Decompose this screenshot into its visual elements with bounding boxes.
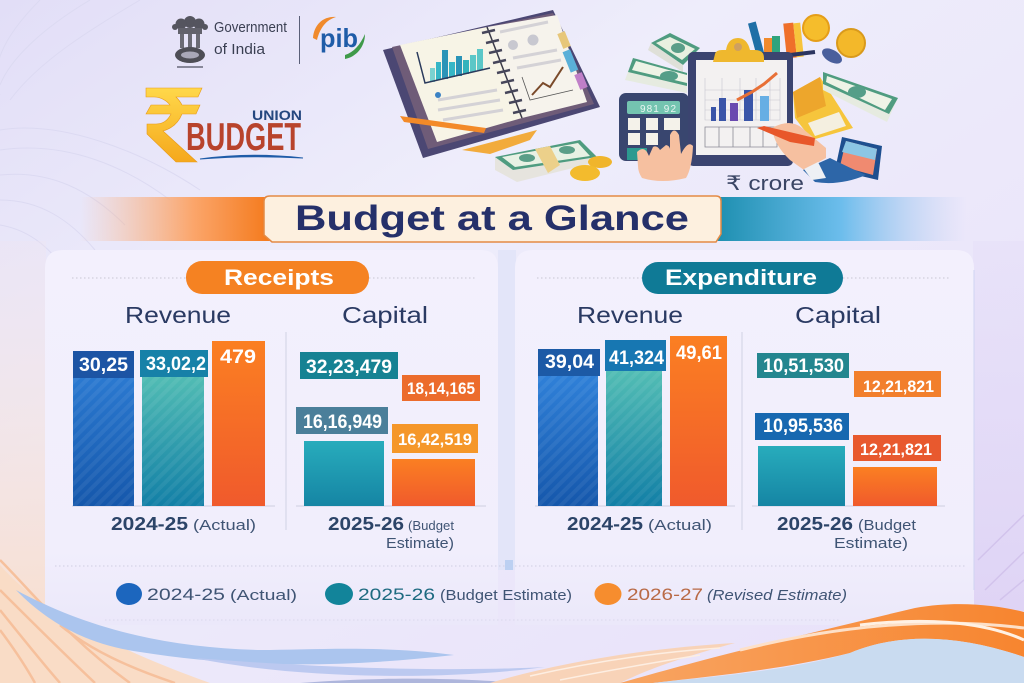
panel background [515, 250, 974, 625]
hand on calculator [637, 130, 693, 181]
page tabs [557, 31, 571, 49]
banknotes left [625, 33, 700, 93]
bottom wave decoration [0, 560, 1024, 683]
legend item: actual: (Actual) [230, 587, 297, 604]
icon: national emblem [172, 16, 208, 68]
value 12,21,821: 12,21,821 [860, 440, 932, 459]
panel: expenditure [515, 250, 974, 625]
bar 2: 41,324 [609, 348, 664, 369]
title text: Budget at a Glance [295, 199, 689, 238]
crore unit label: ₹ crore [726, 173, 804, 195]
right year label: (Budget [408, 518, 454, 533]
capital bar chart [296, 352, 480, 506]
bar 2 [605, 340, 666, 506]
value 16,42,519 [392, 424, 478, 453]
value 10,51,530: 10,51,530 [763, 356, 844, 377]
value 12,21,821 [853, 435, 941, 461]
value 18,14,165 [402, 375, 480, 401]
calculator [619, 93, 689, 161]
receipts pill: Receipts [224, 265, 334, 290]
value 12,21,821: 12,21,821 [863, 377, 934, 396]
band blue [716, 197, 966, 241]
government text: Government [214, 19, 288, 36]
panel background [45, 250, 498, 625]
legend [116, 583, 847, 605]
bar 2: 33,02,2 [146, 354, 206, 375]
expenditure pill [642, 262, 843, 294]
gold coin [803, 15, 829, 41]
blue pill [819, 45, 845, 67]
union text: UNION [252, 107, 302, 123]
banknote right [823, 72, 898, 122]
left year label: (Actual) [648, 517, 712, 534]
bar 3 [212, 341, 265, 506]
icon: gold rupee [146, 88, 202, 162]
bar 2 [140, 350, 208, 506]
government of India logo [172, 16, 365, 68]
legend item: actual: 2024-25 [147, 585, 225, 604]
value 10,95,536: 10,95,536 [763, 416, 843, 437]
right year label: Estimate) [834, 535, 908, 552]
right year label [328, 514, 454, 552]
budget text: BUDGET [186, 116, 301, 159]
revenue heading: Revenue [125, 302, 231, 328]
revenue bar chart [73, 341, 265, 506]
gold coins [588, 156, 612, 168]
envelope [793, 77, 853, 140]
notebook [383, 10, 600, 158]
bar 1 [73, 351, 134, 506]
orange bar [392, 459, 475, 506]
icon: PIB logo: pib [320, 23, 358, 53]
panel: receipts [45, 250, 498, 625]
left year label [567, 514, 712, 534]
value 16,16,949: 16,16,949 [303, 412, 382, 433]
teal bar [304, 441, 384, 506]
spiral binding [487, 27, 522, 118]
legend item: revised estimate: (Revised Estimate) [707, 587, 847, 604]
illustration: calculator clipboard and hands [619, 15, 898, 195]
bar 3 [670, 336, 727, 506]
tablet [835, 137, 882, 180]
bar 1 [538, 349, 600, 506]
revenue bar chart [538, 336, 727, 506]
bar 1: 39,04 [545, 352, 594, 373]
union budget logo [146, 88, 303, 162]
calculator: 981 92 [640, 104, 676, 115]
line chart on page [532, 67, 563, 95]
illustration: notebook and cash [383, 10, 612, 182]
value 32,23,479 [300, 352, 398, 379]
pens and chart blocks [748, 22, 815, 58]
expenditure pill: Expenditure [665, 265, 817, 290]
writing hand and sleeve [772, 123, 866, 183]
receipts pill [186, 261, 369, 294]
cash bundle [495, 140, 597, 182]
bar 3: 49,61 [676, 343, 722, 364]
orange pen [400, 116, 486, 133]
revenue heading: Revenue [577, 302, 683, 328]
left year label: 2024-25 [567, 514, 643, 534]
capital heading: Capital [795, 302, 881, 328]
band orange [80, 197, 270, 241]
bar 1: 30,25 [79, 355, 128, 376]
right year label: 2025-26 [328, 514, 404, 534]
title plate [264, 196, 721, 242]
capital heading: Capital [342, 302, 428, 328]
right year label [777, 514, 917, 552]
left year label: (Actual) [193, 517, 256, 534]
legend item: budget estimate: 2025-26 [358, 585, 435, 604]
left year label: 2024-25 [111, 514, 188, 534]
clipboard [688, 38, 793, 166]
value 12,21,821 [854, 371, 941, 397]
right year label: (Budget [858, 517, 917, 534]
legend item: revised estimate [594, 583, 847, 605]
right year label: Estimate) [386, 535, 454, 552]
value 32,23,479: 32,23,479 [306, 357, 392, 378]
writing pen [757, 126, 815, 146]
right year label: 2025-26 [777, 514, 853, 534]
value 10,95,536 [755, 413, 849, 440]
value 18,14,165: 18,14,165 [407, 379, 475, 398]
legend item: budget estimate: (Budget Estimate) [440, 587, 572, 604]
yellow folder [462, 130, 537, 154]
left year label [111, 514, 256, 534]
of india text: of India [214, 41, 266, 58]
teal bar [758, 446, 845, 506]
value 16,42,519: 16,42,519 [398, 430, 472, 449]
gold coin front [570, 165, 600, 181]
bar 3: 479 [220, 347, 256, 368]
icon: PIB logo [313, 17, 365, 59]
title banner [80, 196, 966, 242]
legend item: revised estimate: 2026-27 [627, 585, 703, 604]
gold coin [837, 29, 865, 57]
bar chart on page [417, 49, 490, 83]
legend item: actual [116, 583, 297, 605]
orange bar [853, 467, 937, 506]
legend item: budget estimate [325, 583, 572, 605]
capital bar chart [755, 353, 941, 506]
